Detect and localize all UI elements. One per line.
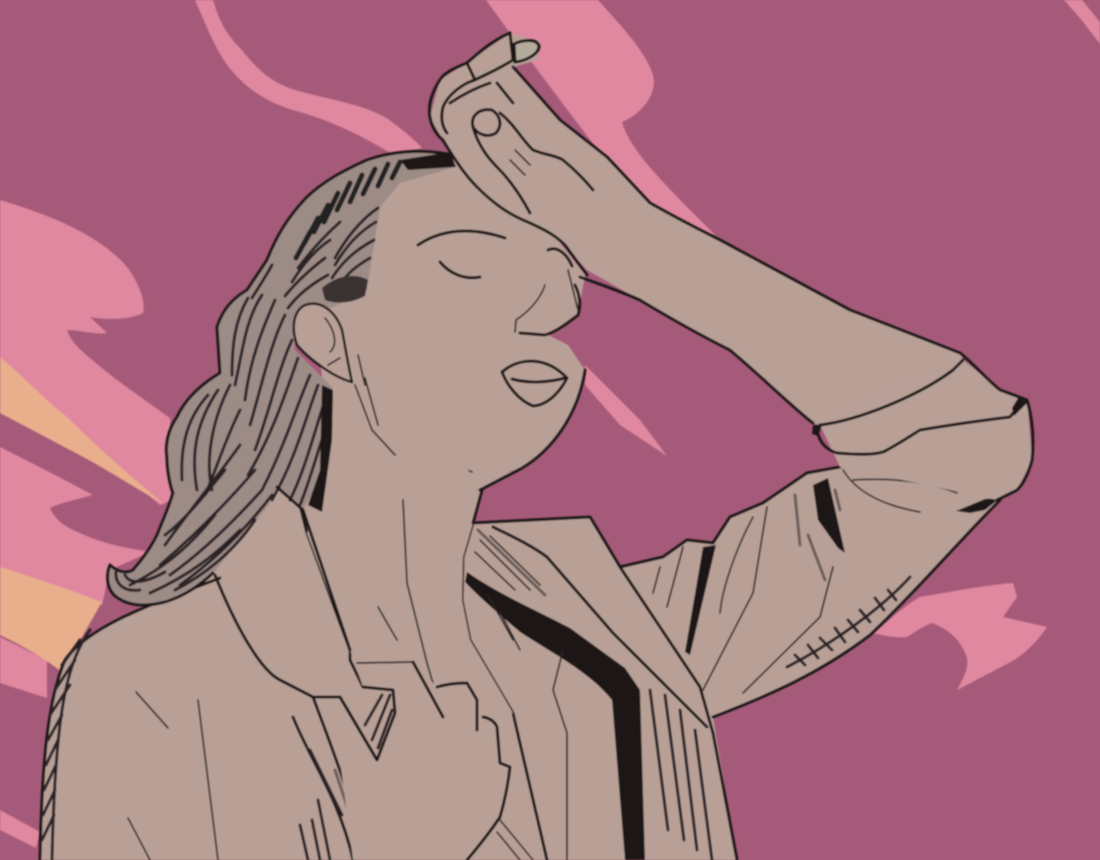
left lapel lower edge — [293, 717, 353, 860]
raised arm and hand — [429, 33, 963, 425]
sleeve hatching — [787, 577, 910, 667]
cheek hatching — [355, 355, 395, 455]
shoulder hatching — [42, 630, 90, 860]
far eye — [548, 249, 572, 266]
jacket fold shading — [465, 572, 645, 860]
flames orange — [0, 357, 165, 672]
face — [315, 160, 585, 490]
nail — [514, 40, 539, 62]
fingers — [429, 33, 510, 140]
dark hair patch — [322, 276, 368, 303]
ponytail strands — [116, 295, 325, 593]
hair mid strands — [252, 208, 378, 308]
hair — [108, 151, 456, 650]
hair top ribbing — [296, 162, 400, 258]
neck — [307, 390, 515, 720]
eyebrow — [418, 231, 505, 245]
right lapel — [473, 517, 737, 860]
lips — [502, 361, 567, 406]
bent finger — [473, 127, 530, 213]
thick hair top — [400, 152, 456, 170]
rolled cuff — [812, 353, 1033, 500]
ear — [294, 304, 352, 382]
closed eye — [440, 262, 480, 278]
hair shadow behind neck — [308, 385, 333, 512]
clutching hand on chest — [340, 662, 533, 860]
jacket and sleeve — [40, 467, 1000, 860]
